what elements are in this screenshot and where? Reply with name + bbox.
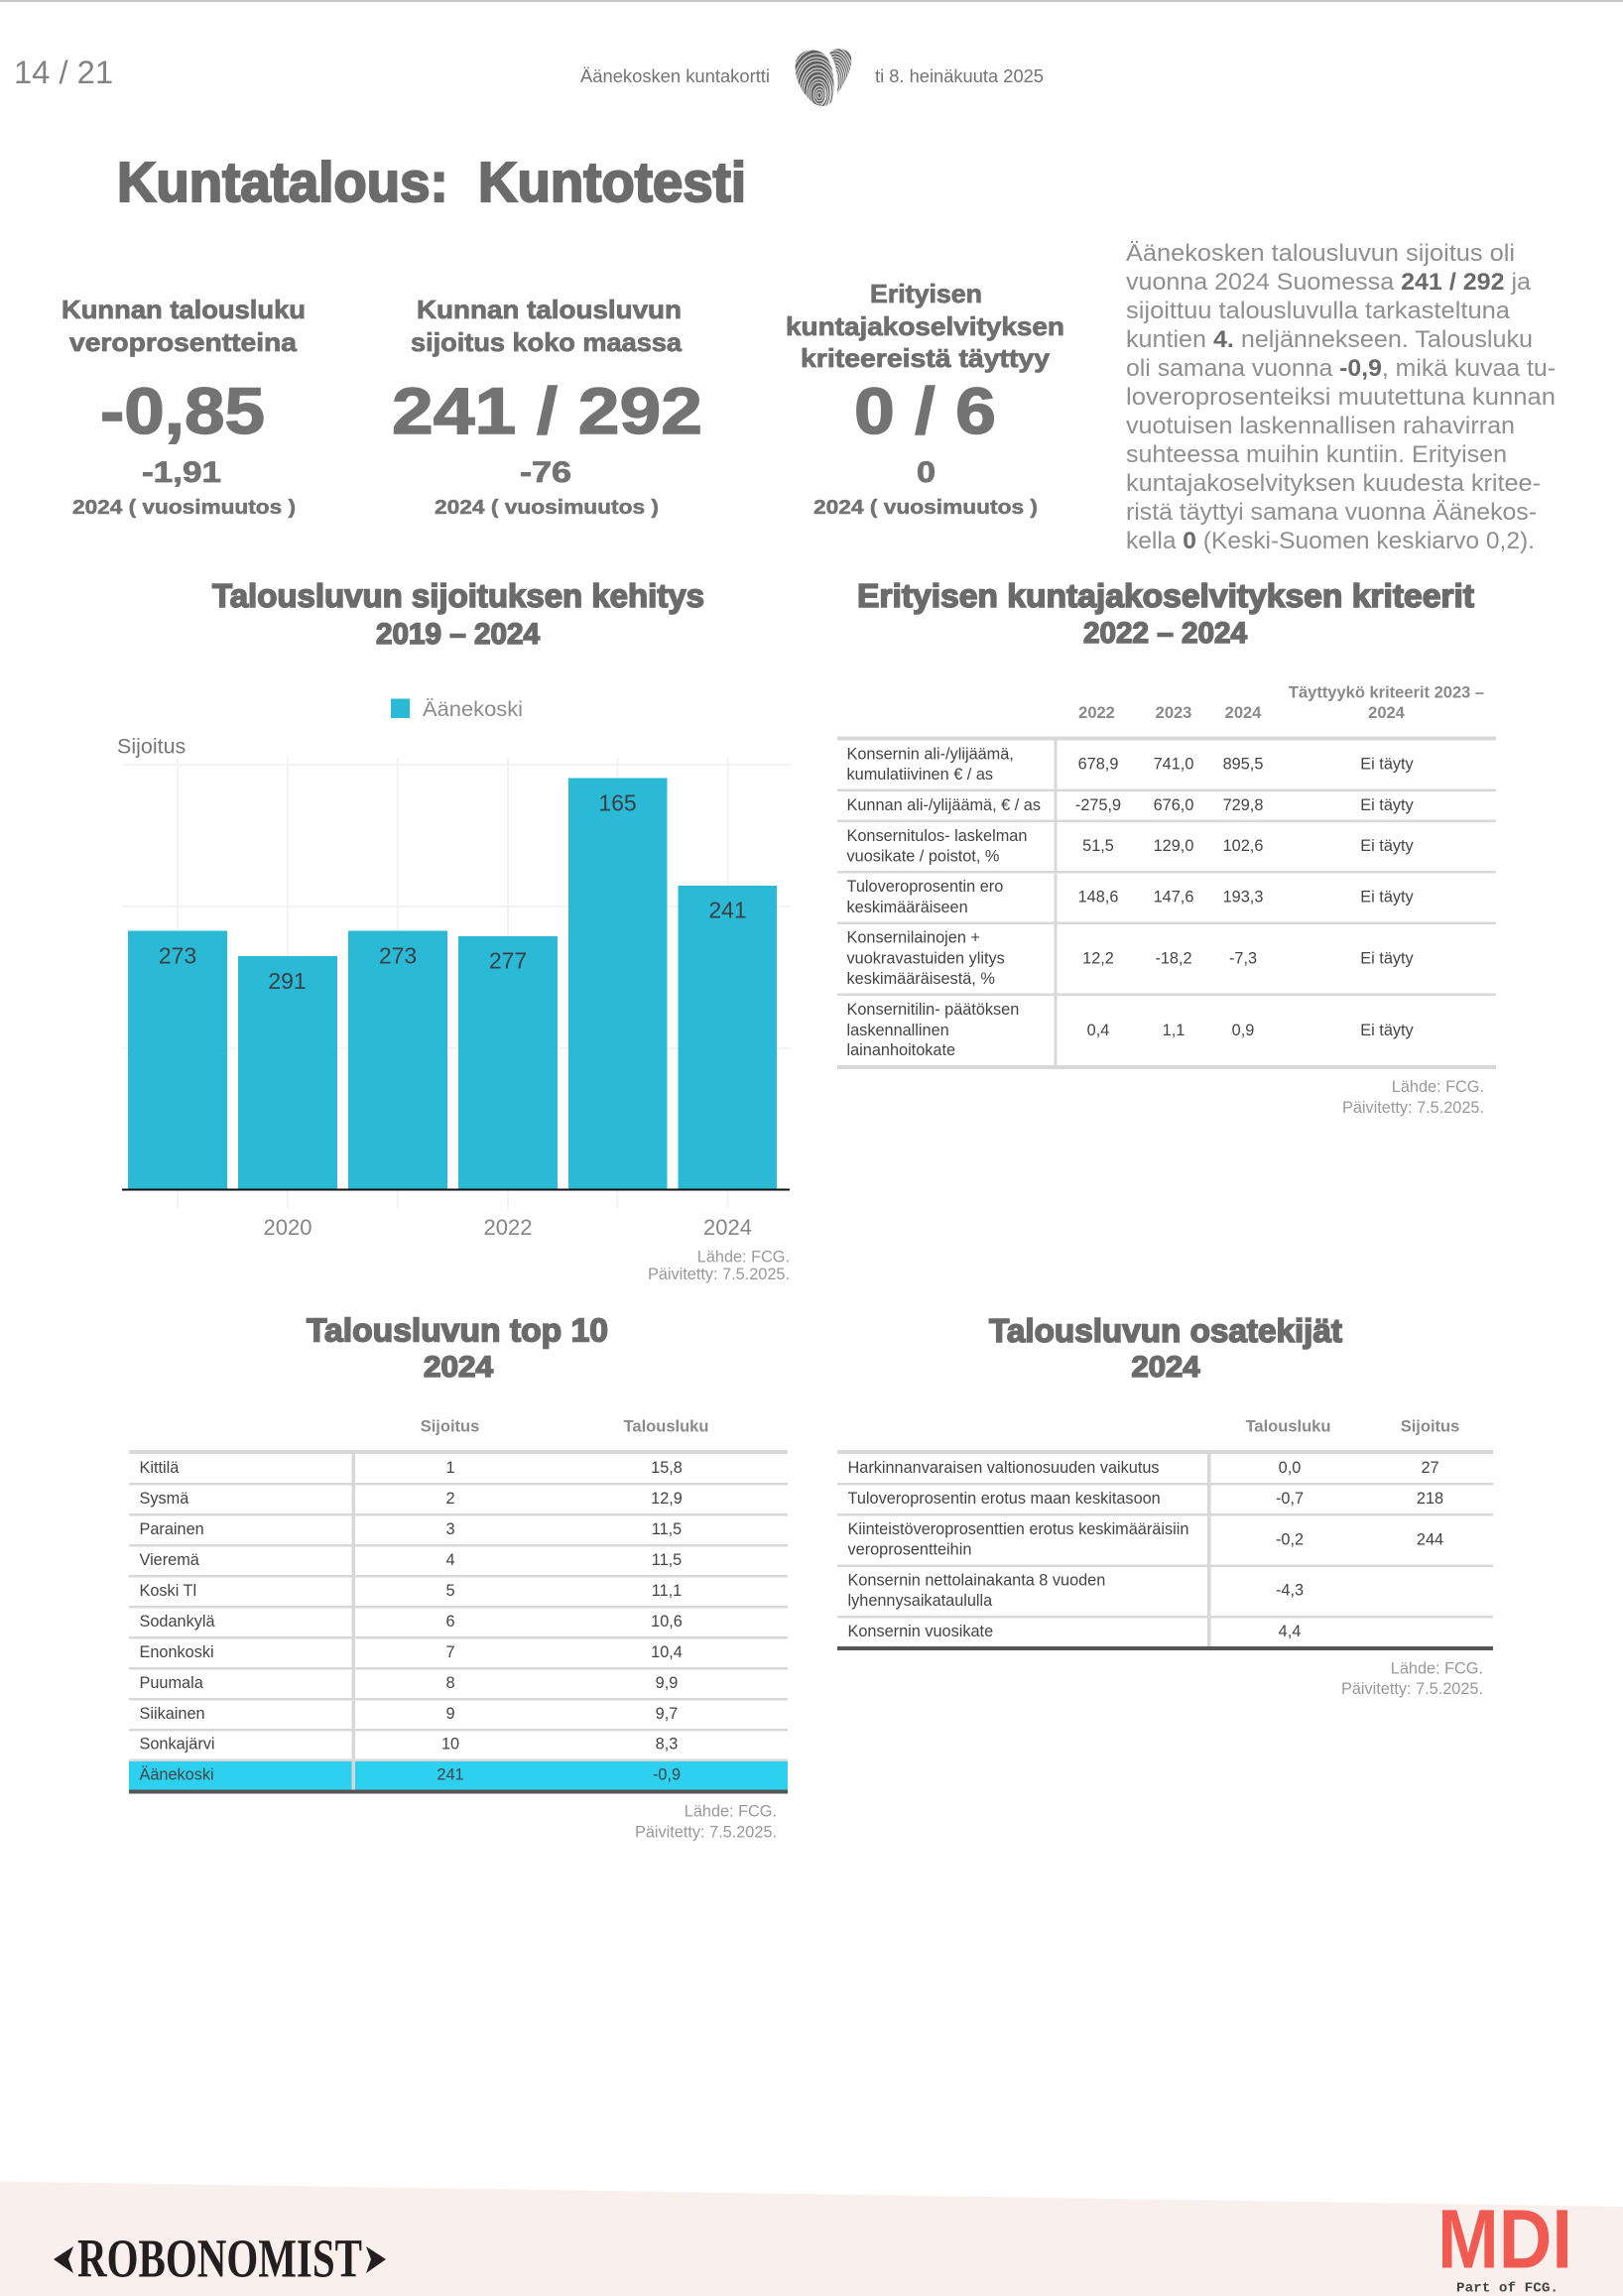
panel: KPI sijoitus <box>392 295 702 519</box>
row: lainanhoitokate: 0,4 <box>1087 1022 1109 1039</box>
row: Koski Tl: Koski Tl <box>139 1582 196 1600</box>
row: kunta: 729,8 <box>1223 796 1263 814</box>
row: Sodankylä <box>139 1613 683 1631</box>
row: Siikainen: 9,7 <box>656 1705 678 1723</box>
KPI value: -0,85 <box>100 374 265 447</box>
KPI caption: 2024 ( vuosimuutos ) <box>72 497 296 519</box>
source note: Päivitetty: 7.5.2025. <box>1341 1680 1483 1698</box>
row: konserni kumulatiivinen: Ei täyty <box>1360 756 1415 774</box>
row: Parainen: 3 <box>445 1520 455 1538</box>
row: Vieremä: Vieremä <box>139 1551 200 1569</box>
row: tuloveroprosentti: keskimääräiseen <box>847 899 968 916</box>
row: kunta <box>847 796 1415 814</box>
row: tuloveroprosentti: 147,6 <box>1154 889 1193 906</box>
row: Koski Tl <box>139 1582 682 1600</box>
KPI value: 0 / 6 <box>854 374 996 447</box>
heading: top 10 <box>307 1311 608 1384</box>
row: valtionosuus: Harkinnanvaraisen valtionosuuden vaikutus <box>847 1459 1160 1477</box>
source note <box>1342 1078 1484 1117</box>
KPI change: 0 <box>917 456 936 489</box>
source note: Päivitetty: 7.5.2025. <box>1342 1099 1484 1117</box>
row: nettolainakanta: lyhennysaikataululla <box>847 1592 993 1610</box>
row: Puumala <box>139 1674 678 1692</box>
row: kiinteistövero: veroprosentteihin <box>847 1541 971 1559</box>
source note: Lähde: FCG. <box>1391 1660 1483 1678</box>
row: Sonkajärvi: Sonkajärvi <box>139 1736 215 1753</box>
table header: Sijoitus <box>1401 1418 1459 1436</box>
row: Siikainen <box>139 1705 678 1723</box>
row: lainat: -7,3 <box>1229 950 1257 968</box>
row: konserni kumulatiivinen: 741,0 <box>1154 756 1193 774</box>
table header: Täyttyykö kriteerit 2023 – <box>1289 684 1484 702</box>
bar chart: 273 <box>159 942 196 968</box>
table rules <box>837 736 1496 1069</box>
row: lainanhoitokate: 1,1 <box>1163 1022 1185 1039</box>
text block: summary paragraph: suhteessa muihin kuntiin. Erityisen <box>1126 441 1507 468</box>
row: Vieremä: 11,5 <box>652 1551 682 1569</box>
row: nettolainakanta <box>847 1571 1304 1610</box>
text block: summary paragraph: kuntien 4. neljännekseen. Talousluku <box>1126 326 1533 353</box>
row: tuloveroprosentti: 148,6 <box>1078 889 1118 906</box>
row: Koski Tl: 11,1 <box>652 1582 682 1600</box>
row: vuosikate: Konsernitulos- laskelman <box>847 827 1027 845</box>
bar chart: 2020 <box>264 1215 312 1240</box>
row: kiinteistövero: -0,2 <box>1276 1531 1304 1549</box>
table header: Talousluku <box>624 1418 708 1436</box>
row: Sonkajärvi <box>139 1736 678 1753</box>
source note: Päivitetty: 7.5.2025. <box>635 1823 777 1841</box>
text block: summary paragraph: kuntajakoselvityksen kuudesta kritee- <box>1126 470 1541 497</box>
panel: criteria table <box>837 577 1496 1117</box>
row: lainat: vuokravastuiden ylitys <box>847 950 1005 968</box>
row: Koski Tl: 5 <box>445 1582 455 1600</box>
row: konserni kumulatiivinen: 678,9 <box>1078 756 1118 774</box>
KPI heading <box>786 279 1064 373</box>
bar chart: 291 <box>268 968 307 994</box>
panel: KPI kriteerit <box>786 279 1064 519</box>
row: valtionosuus: 0,0 <box>1279 1459 1301 1477</box>
source note: Lähde: FCG. <box>685 1803 777 1821</box>
text block: summary paragraph: ristä täyttyi samana vuonna Äänekos- <box>1126 499 1537 526</box>
row: lainat: Ei täyty <box>1360 950 1415 968</box>
row: lainanhoitokate: 0,9 <box>1232 1022 1254 1039</box>
row: Sysmä: Sysmä <box>139 1490 189 1508</box>
row: lainat: Konsernilainojen + <box>847 928 980 946</box>
y axis title: Sijoitus <box>117 734 186 758</box>
source note <box>648 1248 790 1283</box>
row: nettolainakanta: Konsernin nettolainakanta 8 vuoden <box>847 1571 1105 1589</box>
row: tuloveroprosentti: -0,7 <box>1276 1490 1304 1508</box>
row: kiinteistövero: 244 <box>1417 1531 1443 1549</box>
row: lainat <box>847 928 1415 988</box>
table rules <box>129 1450 788 1793</box>
row: vuosikate: Konsernin vuosikate <box>847 1623 993 1640</box>
highlight row background <box>129 1761 788 1789</box>
row: vuosikate <box>847 1623 1301 1640</box>
source note <box>1341 1660 1483 1698</box>
row: Kittilä: 15,8 <box>651 1459 683 1477</box>
table rules <box>837 1450 1493 1650</box>
row: tuloveroprosentti: Ei täyty <box>1360 889 1415 906</box>
logo: MDI: MDI <box>1437 2192 1572 2285</box>
text block: summary paragraph: sijoittuu talousluvulla tarkasteltuna <box>1126 298 1511 324</box>
heading: chart <box>212 577 704 651</box>
source note: Lähde: FCG. <box>1392 1078 1484 1096</box>
row: Äänekoski highlighted: Äänekoski <box>139 1765 214 1783</box>
row: kunta: Ei täyty <box>1360 796 1415 814</box>
table header: 2022 <box>1078 704 1115 722</box>
heading: chart: Talousluvun sijoituksen kehitys <box>212 577 704 614</box>
bar chart <box>122 758 790 1240</box>
row: kiinteistövero <box>847 1520 1443 1559</box>
KPI heading: veroprosentteina <box>69 327 298 357</box>
table header: 2023 <box>1156 704 1191 722</box>
row: Sysmä: 12,9 <box>651 1490 683 1508</box>
KPI value: 241 / 292 <box>392 374 702 447</box>
heading: top 10: 2024 <box>424 1351 493 1384</box>
icon: fingerprint heart <box>796 49 851 106</box>
text block: summary paragraph: vuotuisen laskennallisen rahavirran <box>1126 413 1515 439</box>
KPI heading: Erityisen <box>870 279 982 308</box>
row: tuloveroprosentti: Tuloveroprosentin ero <box>847 878 1003 896</box>
title: Kuntatalous: Kuntotesti <box>117 151 746 214</box>
bar chart: 241 <box>708 897 747 922</box>
text block: summary paragraph: loveroprosenteiksi muutettuna kunnan <box>1126 384 1556 411</box>
row: Siikainen: 9 <box>445 1705 455 1723</box>
heading: components: Talousluvun osatekijät <box>989 1312 1342 1349</box>
row: vuosikate: Ei täyty <box>1360 837 1415 855</box>
text block: summary paragraph: oli samana vuonna -0,9, mikä kuvaa tu- <box>1126 355 1556 382</box>
KPI heading: kriteereistä täyttyy <box>801 343 1051 373</box>
row: Vieremä: 4 <box>445 1551 455 1569</box>
row: tuloveroprosentti <box>847 1490 1443 1508</box>
row: tuloveroprosentti: 218 <box>1417 1490 1443 1508</box>
row: vuosikate: 51,5 <box>1082 837 1114 855</box>
row: tuloveroprosentti: 193,3 <box>1223 889 1263 906</box>
row: Sonkajärvi: 8,3 <box>656 1736 678 1753</box>
row: lainat: keskimääräisestä, % <box>847 970 995 988</box>
source note: Lähde: FCG. <box>697 1248 790 1266</box>
row: konserni kumulatiivinen <box>847 746 1415 784</box>
table header: 2024 <box>1225 704 1262 722</box>
row: kunta: -275,9 <box>1075 796 1121 814</box>
row: Puumala: 8 <box>445 1674 455 1692</box>
text block: summary paragraph <box>1126 240 1556 554</box>
heading: criteria: 2022 – 2024 <box>1083 617 1247 650</box>
row: lainanhoitokate: Ei täyty <box>1360 1022 1415 1039</box>
row: Enonkoski: 10,4 <box>651 1643 683 1661</box>
source note: Päivitetty: 7.5.2025. <box>648 1266 790 1283</box>
heading: criteria <box>857 577 1474 650</box>
KPI change: -1,91 <box>142 456 221 489</box>
source note <box>635 1803 777 1841</box>
row: Parainen: Parainen <box>139 1520 204 1538</box>
row: Puumala: Puumala <box>139 1674 204 1692</box>
heading: components <box>989 1312 1342 1384</box>
row: nettolainakanta: -4,3 <box>1276 1581 1304 1599</box>
row: vuosikate: 4,4 <box>1279 1623 1301 1640</box>
row: konserni kumulatiivinen: kumulatiivinen € / as <box>847 766 993 784</box>
header: date: ti 8. heinäkuuta 2025 <box>875 66 1044 86</box>
table header: 2024 <box>1368 704 1406 722</box>
table header <box>1078 684 1484 722</box>
row: Enonkoski: 7 <box>445 1643 455 1661</box>
KPI caption: 2024 ( vuosimuutos ) <box>813 497 1038 519</box>
row: Parainen: 11,5 <box>652 1520 682 1538</box>
panel: rank trend chart <box>117 577 790 1283</box>
panel: components table <box>837 1312 1493 1698</box>
row: konserni kumulatiivinen: 895,5 <box>1223 756 1263 774</box>
header: card name: Äänekosken kuntakortti <box>580 66 770 86</box>
row: Sodankylä: Sodankylä <box>139 1613 215 1631</box>
row: Sysmä: 2 <box>445 1490 455 1508</box>
heading: chart: 2019 – 2024 <box>376 618 540 651</box>
row: Kittilä: Kittilä <box>139 1459 180 1477</box>
row: lainat: 12,2 <box>1082 950 1114 968</box>
bar chart: 2022 <box>484 1215 532 1240</box>
heading: top 10: Talousluvun top 10 <box>307 1311 608 1349</box>
row: vuosikate: 102,6 <box>1223 837 1263 855</box>
row: Sodankylä: 10,6 <box>651 1613 683 1631</box>
row: valtionosuus <box>847 1459 1439 1477</box>
row: Sodankylä: 6 <box>445 1613 455 1631</box>
legend: Äänekoski <box>423 698 523 721</box>
row: vuosikate: 129,0 <box>1154 837 1193 855</box>
text block: summary paragraph: Äänekosken talousluvun sijoitus oli <box>1126 240 1515 267</box>
row: Äänekoski highlighted <box>139 1765 681 1783</box>
row: lainanhoitokate <box>847 1001 1415 1059</box>
row: Kittilä: 1 <box>445 1459 455 1477</box>
heading: criteria: Erityisen kuntajakoselvityksen kriteerit <box>857 577 1474 614</box>
row: kunta: Kunnan ali-/ylijäämä, € / as <box>847 796 1041 814</box>
row: konserni kumulatiivinen: Konsernin ali-/ylijäämä, <box>847 746 1014 764</box>
row: Enonkoski: Enonkoski <box>139 1643 214 1661</box>
row: lainanhoitokate: Konsernitilin- päätöksen <box>847 1001 1019 1019</box>
row: kiinteistövero: Kiinteistöveroprosenttien erotus keskimääräisiin <box>847 1520 1188 1538</box>
table header: Talousluku <box>1246 1418 1330 1436</box>
bar chart: 277 <box>489 948 527 974</box>
row: lainanhoitokate: laskennallinen <box>847 1022 949 1039</box>
bar chart: 2024 <box>703 1215 752 1240</box>
row: valtionosuus: 27 <box>1421 1459 1439 1477</box>
row: tuloveroprosentti: Tuloveroprosentin erotus maan keskitasoon <box>847 1490 1161 1508</box>
text block: summary paragraph: kella 0 (Keski-Suomen keskiarvo 0,2). <box>1126 528 1535 554</box>
KPI heading: Kunnan talousluku <box>62 295 306 324</box>
text block: summary paragraph: vuonna 2024 Suomessa 241 / 292 ja <box>1126 269 1532 296</box>
KPI heading: Kunnan talousluvun <box>417 295 682 324</box>
panel: top 10 table <box>129 1311 788 1841</box>
row: Enonkoski <box>139 1643 683 1661</box>
KPI heading: sijoitus koko maassa <box>411 327 683 357</box>
row: Puumala: 9,9 <box>656 1674 678 1692</box>
bar chart: 273 <box>379 942 417 968</box>
logo: Robonomist: ROBONOMIST <box>77 2228 362 2289</box>
row: Sysmä <box>139 1490 683 1508</box>
KPI heading: kuntajakoselvityksen <box>786 311 1064 341</box>
row: vuosikate: vuosikate / poistot, % <box>847 847 999 865</box>
KPI heading <box>411 295 683 357</box>
KPI heading <box>62 295 306 357</box>
bar chart: 165 <box>598 789 637 815</box>
row: kunta: 676,0 <box>1154 796 1193 814</box>
row: vuosikate <box>847 827 1415 865</box>
row: Sonkajärvi: 10 <box>441 1736 459 1753</box>
table header <box>1246 1418 1459 1436</box>
row: lainat: -18,2 <box>1155 950 1192 968</box>
heading: components: 2024 <box>1131 1351 1200 1384</box>
KPI caption: 2024 ( vuosimuutos ) <box>435 497 659 519</box>
KPI change: -76 <box>520 456 571 489</box>
row: Kittilä <box>139 1459 683 1477</box>
row: Äänekoski highlighted: -0,9 <box>653 1765 681 1783</box>
row: Vieremä <box>139 1551 682 1569</box>
row: Parainen <box>139 1520 682 1538</box>
table header: Sijoitus <box>421 1418 479 1436</box>
footer band <box>0 2182 1623 2296</box>
page number: 14 / 21 <box>14 55 113 90</box>
row: lainanhoitokate: lainanhoitokate <box>847 1041 955 1059</box>
table header <box>421 1418 708 1436</box>
row: Äänekoski highlighted: 241 <box>437 1765 464 1783</box>
row: Siikainen: Siikainen <box>139 1705 205 1723</box>
panel: KPI talousluku <box>62 295 306 519</box>
row: tuloveroprosentti <box>847 878 1415 916</box>
